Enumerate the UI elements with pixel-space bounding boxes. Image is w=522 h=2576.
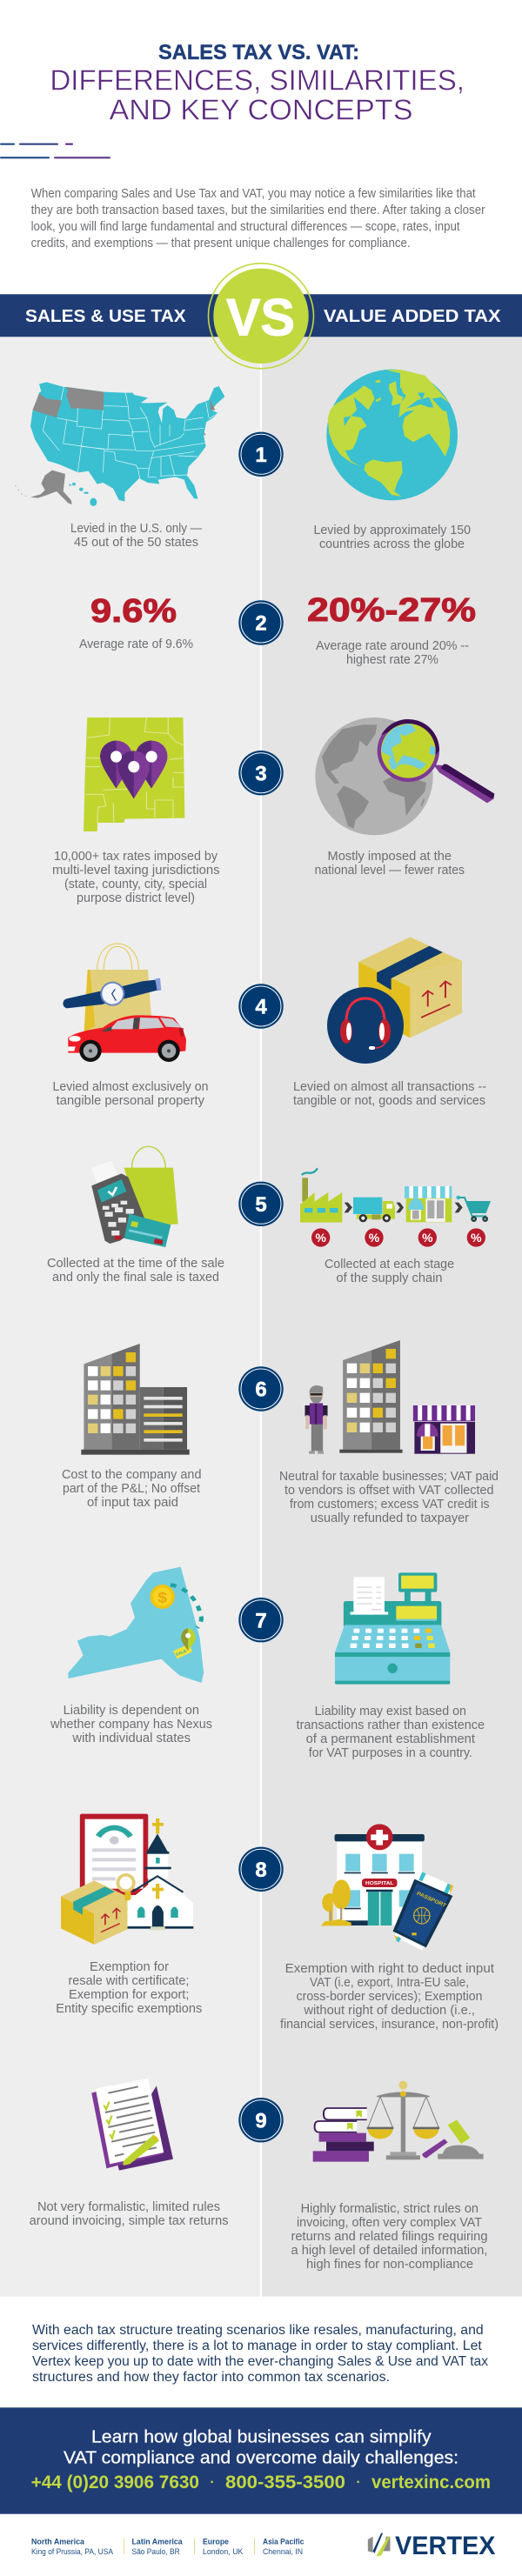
badge 1: 1 <box>255 444 267 467</box>
title: SALES TAX VS. VAT: <box>158 41 359 64</box>
text: nexus: with individual states <box>71 1732 191 1745</box>
icon: supply chain: % <box>471 1231 482 1245</box>
icon: cash register <box>335 1572 450 1685</box>
vs badge <box>209 264 313 369</box>
contact line: +44 (0)20 3906 7630 <box>31 2473 199 2493</box>
decorative dashes <box>0 143 110 158</box>
text: VAT average rate: Average rate around 20% -- <box>316 639 469 653</box>
cta heading: Learn how global businesses can simplify <box>91 2426 432 2447</box>
text: levied by countries: countries across the globe <box>319 537 465 551</box>
text: permanent establishment <box>297 1705 485 1760</box>
badge 9: 9 <box>255 2109 267 2132</box>
contact line: · <box>210 2475 215 2490</box>
badge 9 <box>238 2098 284 2142</box>
text: neutral for businesses: Neutral for taxable businesses; VAT paid <box>279 1470 499 1484</box>
text: cost to company: Cost to the company and <box>62 1468 202 1482</box>
badge 6 <box>238 1366 284 1411</box>
text: permanent establishment: transactions rather than existence <box>297 1718 485 1732</box>
text: tax rates: multi-level taxing jurisdictions <box>52 864 220 878</box>
badge 3: 3 <box>255 762 267 785</box>
office locations: North America <box>31 2538 85 2546</box>
header band: SALES & USE TAX <box>25 307 186 326</box>
text: highly formalistic: Highly formalistic, strict rules on <box>301 2202 478 2216</box>
row 3 <box>52 717 494 905</box>
call to action band <box>0 2407 522 2514</box>
icon: certificate, box and church <box>61 1814 193 1945</box>
closing text: services differently, there is a lot to manage in order to stay compliant. Let <box>32 2339 483 2353</box>
text: permanent establishment: of a permanent establishment <box>306 1732 475 1746</box>
text: VAT average rate <box>316 639 469 667</box>
text: tangible property <box>52 1080 209 1108</box>
icon: supply chain <box>300 1168 491 1247</box>
text: exemption for resale <box>56 1960 202 2016</box>
icon: globe <box>326 370 458 500</box>
icon: supply chain: % <box>315 1231 326 1245</box>
text: exemption with right to deduct: cross-border services); Exemption <box>297 1990 482 2004</box>
cta heading <box>64 2426 458 2468</box>
text: collected at sale: and only the final sale is taxed <box>52 1271 219 1285</box>
text: national level: Mostly imposed at the <box>327 850 452 864</box>
text: levied in US <box>70 522 202 550</box>
text: almost all transactions <box>293 1080 486 1108</box>
title: DIFFERENCES, SIMILARITIES, <box>50 64 465 97</box>
text: average rate: Average rate of 9.6% <box>79 637 193 651</box>
text: exemption with right to deduct: VAT (i.e, export, Intra-EU sale, <box>310 1976 469 1990</box>
badge 7 <box>238 1598 284 1642</box>
text: neutral for businesses: to vendors is offset with VAT collected <box>284 1484 494 1498</box>
text: exemption with right to deduct: without right of deduction (i.e., <box>303 2004 475 2018</box>
text: exemption for resale: Exemption for export; <box>69 1988 189 2002</box>
badge 7: 7 <box>255 1609 267 1632</box>
closing text <box>32 2323 488 2385</box>
icon: man, building and store <box>305 1340 475 1454</box>
text: cost to company: of input tax paid <box>87 1496 178 1510</box>
text: tax rates: (state, county, city, special <box>64 878 207 891</box>
badge 1 <box>238 432 284 477</box>
text: nexus: Liability is dependent on <box>64 1704 199 1718</box>
badge 8: 8 <box>255 1859 267 1882</box>
text: collected at sale: Collected at the time of the sale <box>47 1257 224 1271</box>
text: highly formalistic: a high level of detailed information, <box>291 2244 487 2258</box>
icon: supply chain: % <box>422 1231 433 1245</box>
icon: office buildings <box>81 1344 190 1455</box>
text: tax rates: purpose district level) <box>77 891 195 905</box>
row 6 <box>62 1340 499 1525</box>
row 8 <box>56 1814 499 2032</box>
office locations: King of Prussia, PA, USA <box>31 2547 114 2557</box>
text: highly formalistic <box>291 2202 487 2272</box>
logo: Vertex: VERTEX <box>395 2532 496 2560</box>
panel: sales and use tax column <box>0 337 260 2297</box>
icon: hospital and passport: HOSPITAL <box>365 1880 394 1886</box>
intro text: they are both transaction based taxes, but the similarities end there. After taking a closer <box>31 204 485 217</box>
text: highly formalistic: returns and related filings requiring <box>291 2230 487 2244</box>
text: collected at sale <box>47 1257 224 1285</box>
text: highly formalistic: invoicing, often very complex VAT <box>297 2216 482 2230</box>
badge 8 <box>238 1847 284 1892</box>
badge 6: 6 <box>255 1378 267 1402</box>
text: nexus: whether company has Nexus <box>50 1718 212 1732</box>
stat: 9.6%: 9.6% <box>90 593 177 630</box>
text: highly formalistic: high fines for non-compliance <box>306 2258 473 2272</box>
icon: clipboard and pencil <box>91 2079 173 2171</box>
office locations: São Paulo, BR <box>132 2547 180 2557</box>
text: simple tax returns: around invoicing, simple tax returns <box>30 2214 229 2228</box>
row 9 <box>30 2079 487 2272</box>
badge 4: 4 <box>255 996 267 1019</box>
text: neutral for businesses <box>279 1470 499 1525</box>
row 4 <box>52 937 486 1108</box>
icon: box and headset <box>327 937 462 1064</box>
row 1 <box>15 370 471 551</box>
text: exemption for resale: resale with certificate; <box>68 1974 189 1988</box>
text: almost all transactions: Levied on almost all transactions -- <box>293 1080 486 1094</box>
text: levied in US: 45 out of the 50 states <box>74 536 198 550</box>
text: exemption with right to deduct: financial services, insurance, non-profit) <box>280 2018 499 2032</box>
text: permanent establishment: Liability may exist based on <box>315 1705 466 1718</box>
row 2 <box>79 592 476 667</box>
office locations: Chennai, IN <box>263 2547 303 2557</box>
contact line <box>31 2473 491 2493</box>
icon: New York state map: $ <box>157 1589 167 1605</box>
text: levied in US: Levied in the U.S. only — <box>70 522 202 536</box>
office locations: Asia Pacific <box>263 2538 304 2546</box>
text: levied by countries <box>313 524 471 551</box>
contact line: vertexinc.com <box>371 2473 491 2493</box>
closing text: Vertex keep you up to date with the ever-changing Sales & Use and VAT tax <box>32 2354 488 2369</box>
cta heading: VAT compliance and overcome daily challenges: <box>64 2447 458 2468</box>
text: exemption with right to deduct <box>280 1962 499 2032</box>
text: cost to company: part of the P&L; No offset <box>63 1482 200 1496</box>
badge 4 <box>238 984 284 1029</box>
text: simple tax returns <box>30 2200 229 2228</box>
row 7 <box>50 1567 485 1760</box>
contact line: 800-355-3500 <box>225 2473 345 2493</box>
icon: bag watch car <box>63 944 186 1062</box>
icon: hospital and passport <box>321 1824 453 1951</box>
icon: New York state map <box>68 1567 204 1683</box>
panel: value added tax column <box>262 337 522 2297</box>
text: tax rates: 10,000+ tax rates imposed by <box>54 850 218 864</box>
icon: supply chain: % <box>369 1231 380 1245</box>
title <box>50 41 465 127</box>
text: permanent establishment: for VAT purposes in a country. <box>309 1746 472 1760</box>
contact line: · <box>356 2475 361 2490</box>
closing text: structures and how they factor into common tax scenarios. <box>32 2370 390 2385</box>
icon: payment terminal and bag <box>91 1146 178 1247</box>
text: each stage <box>325 1258 454 1285</box>
title: AND KEY CONCEPTS <box>110 94 412 127</box>
text: levied by countries: Levied by approximately 150 <box>313 524 471 537</box>
text: each stage: of the supply chain <box>336 1271 442 1285</box>
text: cost to company <box>62 1468 202 1510</box>
intro text <box>31 187 485 250</box>
office locations <box>31 2538 304 2557</box>
icon: grey globe with magnifier <box>315 717 494 835</box>
icon: New Mexico map with pins <box>84 717 184 831</box>
text: tangible property: Levied almost exclusively on <box>52 1080 209 1094</box>
text: almost all transactions: tangible or not, goods and services <box>293 1094 485 1108</box>
text: neutral for businesses: usually refunded to taxpayer <box>311 1512 469 1525</box>
badge 2 <box>238 600 284 645</box>
closing text: With each tax structure treating scenarios like resales, manufacturing, and <box>32 2323 484 2338</box>
stat: 20%-27%: 20%-27% <box>307 592 476 629</box>
text: simple tax returns: Not very formalistic, limited rules <box>37 2200 220 2214</box>
icon: US map <box>15 382 224 506</box>
row 5 <box>47 1146 491 1285</box>
text: tangible property: tangible personal property <box>57 1094 205 1108</box>
text: exemption with right to deduct: Exemption with right to deduct input <box>285 1962 494 1976</box>
text: exemption for resale: Entity specific exemptions <box>56 2002 202 2016</box>
badge 5: 5 <box>255 1193 267 1217</box>
badge 5 <box>238 1182 284 1226</box>
office locations: London, UK <box>203 2547 244 2557</box>
text: national level <box>315 850 465 878</box>
header band <box>0 294 522 337</box>
icon: New York state map: SALE <box>175 1649 187 1657</box>
badge 2: 2 <box>255 612 267 636</box>
header band: VALUE ADDED TAX <box>324 307 501 326</box>
office locations: Europe <box>203 2538 229 2546</box>
icon: scales, books and gavel <box>313 2081 484 2162</box>
text: neutral for businesses: from customers; excess VAT credit is <box>290 1498 490 1512</box>
intro text: credits, and exemptions — that present unique challenges for compliance. <box>31 237 411 250</box>
text: national level: national level — fewer rates <box>315 864 465 878</box>
icon: hospital and passport: PASSPORT <box>415 1891 447 1909</box>
text: each stage: Collected at each stage <box>325 1258 454 1271</box>
intro text: When comparing Sales and Use Tax and VAT, you may notice a few similarities like that <box>31 187 476 201</box>
office locations: Latin America <box>132 2538 183 2546</box>
text: VAT average rate: highest rate 27% <box>346 653 438 667</box>
vs badge: VS <box>226 289 295 346</box>
text: tax rates <box>52 850 220 905</box>
intro text: look, you will find large fundamental and structural differences — scope, rates, input <box>31 220 460 234</box>
badge 3 <box>238 751 284 795</box>
text: exemption for resale: Exemption for <box>90 1960 169 1974</box>
text: nexus <box>50 1704 212 1745</box>
